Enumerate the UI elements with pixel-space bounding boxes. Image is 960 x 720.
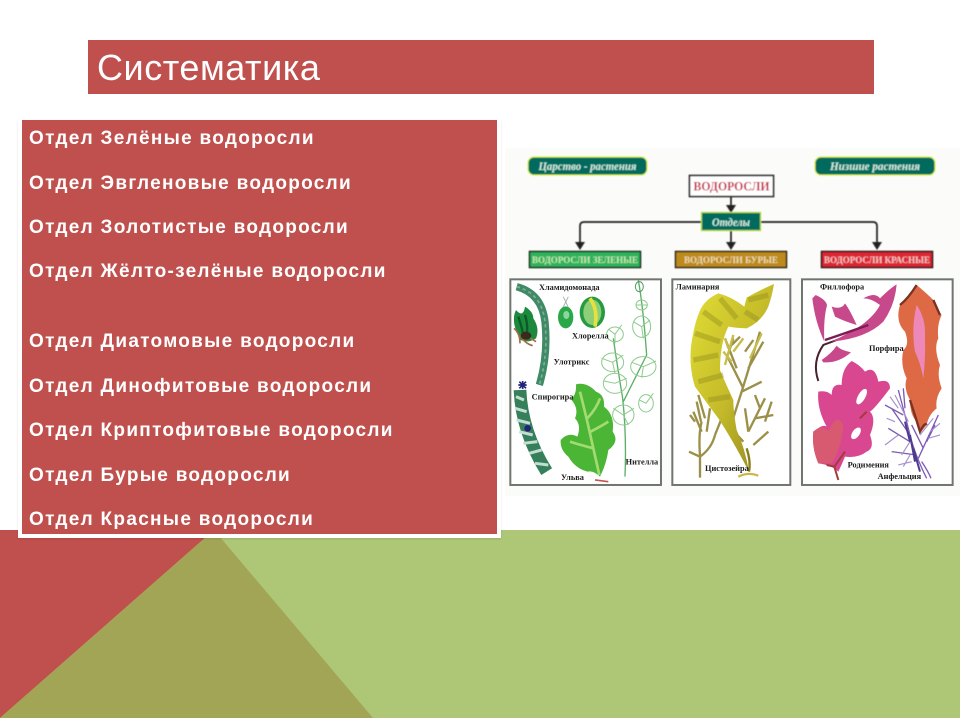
plant: ulothrix filament — [517, 287, 546, 385]
plant: cystoseira branches — [689, 332, 773, 478]
plant labels: brown algae: Ламинария — [676, 282, 720, 291]
plant labels: green algae: Нителла — [626, 457, 659, 466]
plant labels: red algae — [820, 282, 922, 481]
plant labels: brown algae: Цистозейра — [705, 464, 750, 473]
plant: ahnfeltia — [885, 388, 940, 478]
connector arrows — [575, 197, 882, 250]
plant labels: red algae: Филлофора — [820, 282, 865, 291]
plant: chlamydomonas cell — [563, 297, 568, 307]
label: lower plants pill: Низшие растения — [829, 161, 920, 173]
label: kingdom pill: Царство - растения — [538, 161, 637, 173]
plant: ulva — [561, 384, 615, 477]
plant labels: red algae: Родимения — [848, 460, 889, 469]
plant: rhodymenia — [813, 361, 890, 472]
panel: green algae illustration — [510, 279, 661, 485]
list item: yellow-green algae: Отдел Жёлто-зелёные водоросли — [29, 261, 387, 282]
box: divisions node: Отделы — [712, 217, 750, 229]
list item: euglenoid algae: Отдел Эвгленовые водоросли — [29, 173, 352, 194]
label: lower plants pill — [815, 157, 935, 175]
title bar: Систематика — [97, 47, 320, 88]
list item: dinophytes: Отдел Динофитовые водоросли — [29, 376, 372, 397]
box: red algae heading — [822, 252, 932, 268]
plant: spirogyra filament — [520, 390, 547, 472]
plant labels: red algae: Порфира — [869, 344, 904, 353]
panel: red algae illustration — [802, 279, 953, 485]
list item: golden algae: Отдел Золотистые водоросли — [29, 217, 349, 238]
plant labels: green algae: Хлорелла — [572, 331, 610, 340]
plant: phyllophora — [816, 308, 885, 381]
plant: tuft with root — [514, 307, 537, 341]
list item: diatoms: Отдел Диатомовые водоросли — [29, 331, 355, 352]
list item: cryptophytes: Отдел Криптофитовые водоросли — [29, 420, 394, 441]
plant labels: red algae: Анфельция — [878, 472, 922, 481]
label: kingdom pill — [528, 157, 647, 175]
plant: laminaria blade — [690, 284, 774, 472]
list item: brown algae: Отдел Бурые водоросли — [29, 465, 291, 486]
plant labels: brown algae — [676, 282, 750, 473]
panel: brown algae illustration — [672, 279, 790, 485]
plant labels: green algae: Спирогира — [532, 392, 574, 401]
box: green algae heading: ВОДОРОСЛИ ЗЕЛЕНЫЕ — [532, 256, 638, 266]
plant: nitella — [602, 280, 656, 477]
list item: red algae: Отдел Красные водоросли — [29, 509, 314, 530]
box: red algae heading: ВОДОРОСЛИ КРАСНЫЕ — [824, 256, 930, 266]
plant: porphyra — [898, 285, 942, 433]
plant labels: green algae: Хламидомонада — [539, 283, 600, 292]
box: algae root node: ВОДОРОСЛИ — [694, 178, 770, 194]
box: algae root node — [690, 176, 774, 196]
box: green algae heading — [530, 252, 640, 268]
plant labels: green algae: Ульва — [561, 473, 585, 482]
list item: green algae: Отдел Зелёные водоросли — [29, 128, 315, 149]
title bar — [88, 40, 874, 94]
box: brown algae heading — [676, 252, 786, 268]
box: brown algae heading: ВОДОРОСЛИ БУРЫЕ — [684, 256, 778, 266]
plant: chlorella cell — [580, 297, 605, 328]
box: divisions node — [702, 212, 760, 230]
plant labels: green algae — [532, 283, 659, 482]
panel: list of algae divisions — [18, 120, 501, 538]
plant labels: green algae: Улотрикс — [554, 357, 590, 366]
